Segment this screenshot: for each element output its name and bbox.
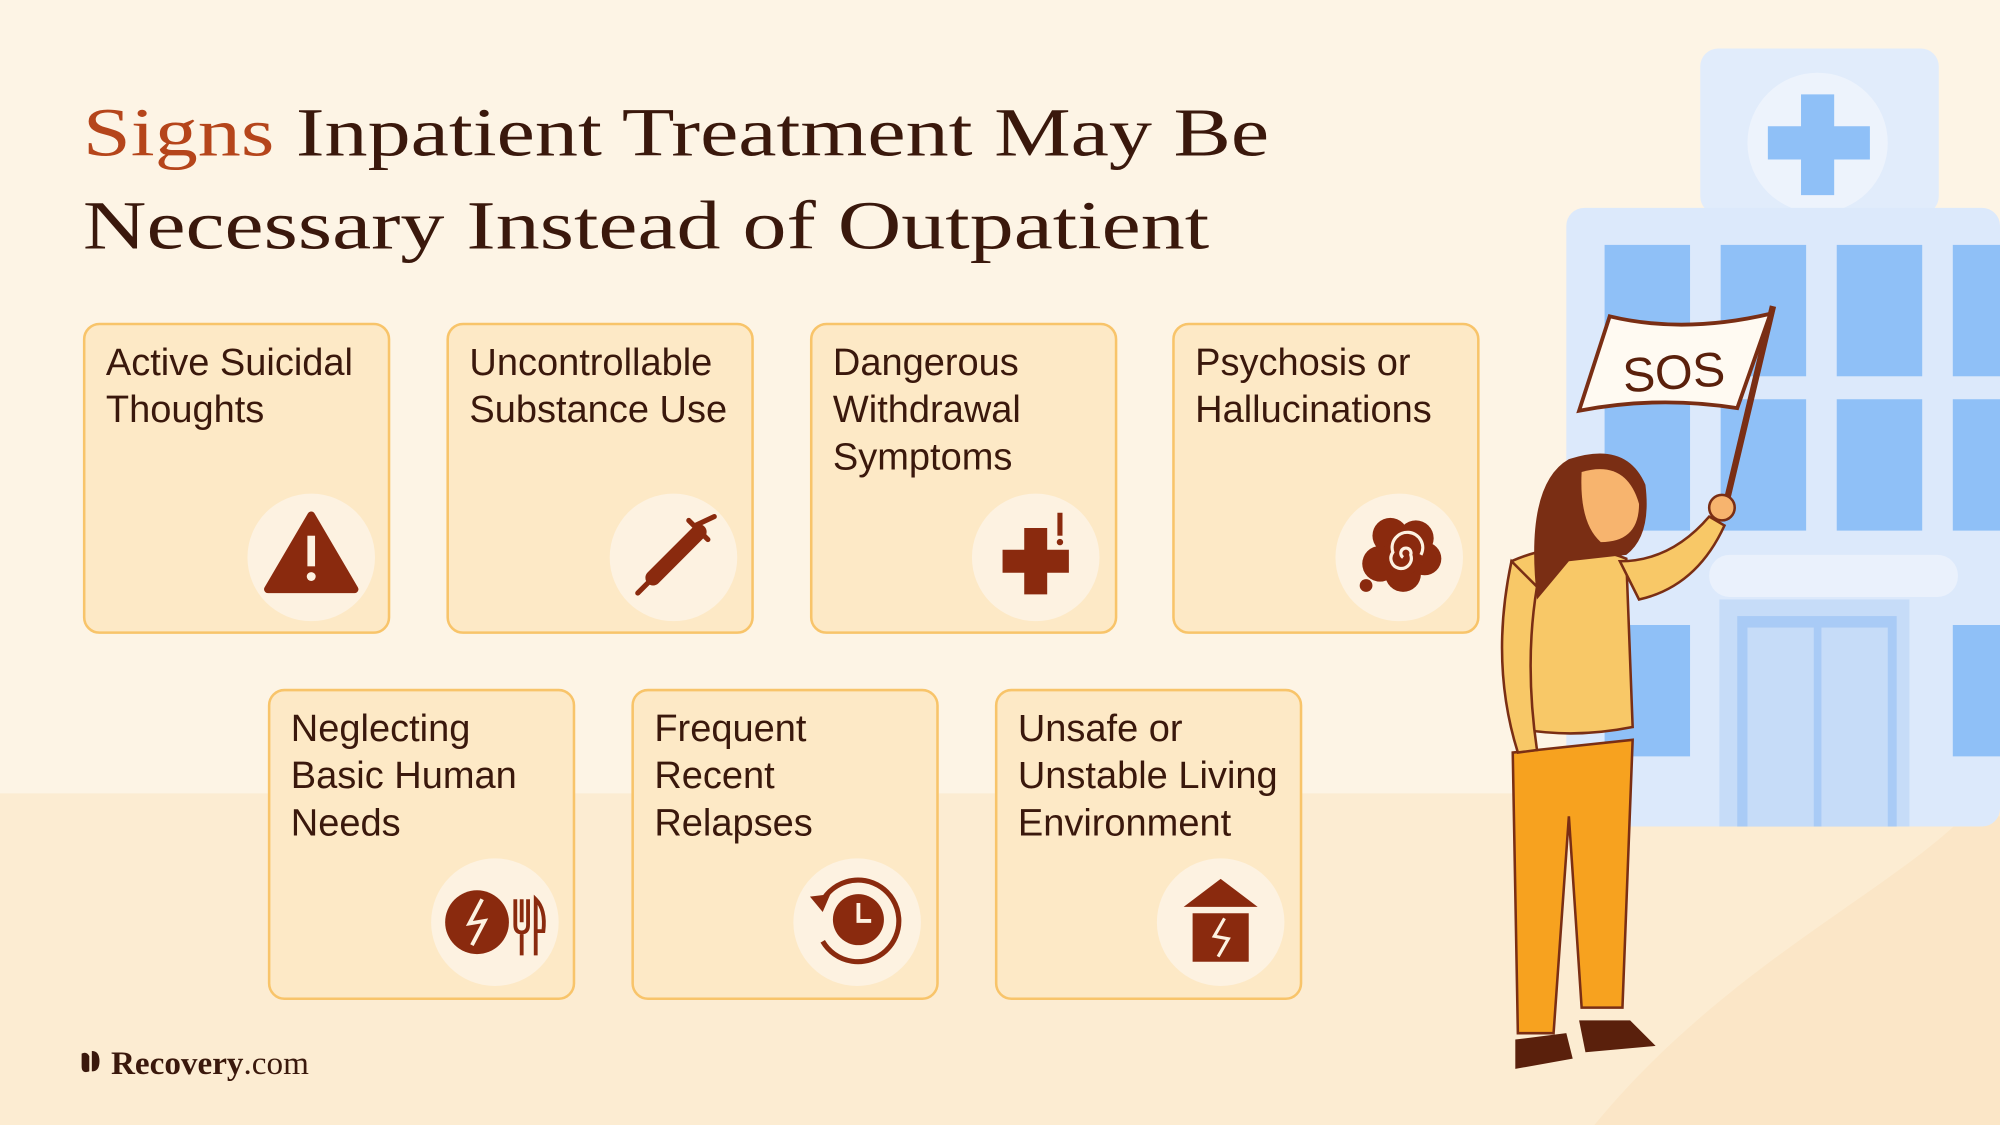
card: Unsafe or Unstable Living Environment: Environment <box>1018 802 1232 844</box>
card: Neglecting Basic Human Needs: Basic Human <box>291 755 517 797</box>
title: Signs Inpatient Treatment May Be <box>83 95 1269 171</box>
card: Active Suicidal Thoughts: Thoughts <box>106 389 264 431</box>
card: Unsafe or Unstable Living Environment: Unstable Living <box>1018 755 1278 797</box>
title: Necessary Instead of Outpatient <box>83 188 1209 264</box>
person with SOS flag: SOS <box>1621 342 1727 403</box>
card: Uncontrollable Substance Use <box>448 324 753 633</box>
card: Frequent Recent Relapses: Relapses <box>654 802 813 844</box>
card: Psychosis or Hallucinations: Psychosis or <box>1195 342 1411 384</box>
title <box>83 95 1269 264</box>
card: Dangerous Withdrawal Symptoms <box>811 324 1116 633</box>
card: Neglecting Basic Human Needs: Needs <box>291 802 401 844</box>
card: Frequent Recent Relapses <box>633 690 938 999</box>
person with SOS flag <box>1502 306 1773 1069</box>
card: Neglecting Basic Human Needs: Neglecting <box>291 708 470 750</box>
card: Uncontrollable Substance Use: Uncontrollable <box>469 342 712 384</box>
hospital <box>1566 48 2000 827</box>
logo: Recovery.com <box>111 1045 309 1082</box>
card: Psychosis or Hallucinations <box>1173 324 1478 633</box>
card: Unsafe or Unstable Living Environment: Unsafe or <box>1018 708 1183 750</box>
card: Frequent Recent Relapses: Frequent <box>654 708 807 750</box>
card: Dangerous Withdrawal Symptoms: Withdrawal <box>833 389 1021 431</box>
card: Active Suicidal Thoughts <box>84 324 389 633</box>
card: Dangerous Withdrawal Symptoms: Symptoms <box>833 436 1012 478</box>
card: Uncontrollable Substance Use: Substance Use <box>469 389 727 431</box>
card: Active Suicidal Thoughts: Active Suicidal <box>106 342 353 384</box>
card: Neglecting Basic Human Needs <box>269 690 574 999</box>
card: Dangerous Withdrawal Symptoms: Dangerous <box>833 342 1019 384</box>
card: Unsafe or Unstable Living Environment <box>996 690 1301 999</box>
card: Frequent Recent Relapses: Recent <box>654 755 775 797</box>
card: Psychosis or Hallucinations: Hallucinations <box>1195 389 1432 431</box>
